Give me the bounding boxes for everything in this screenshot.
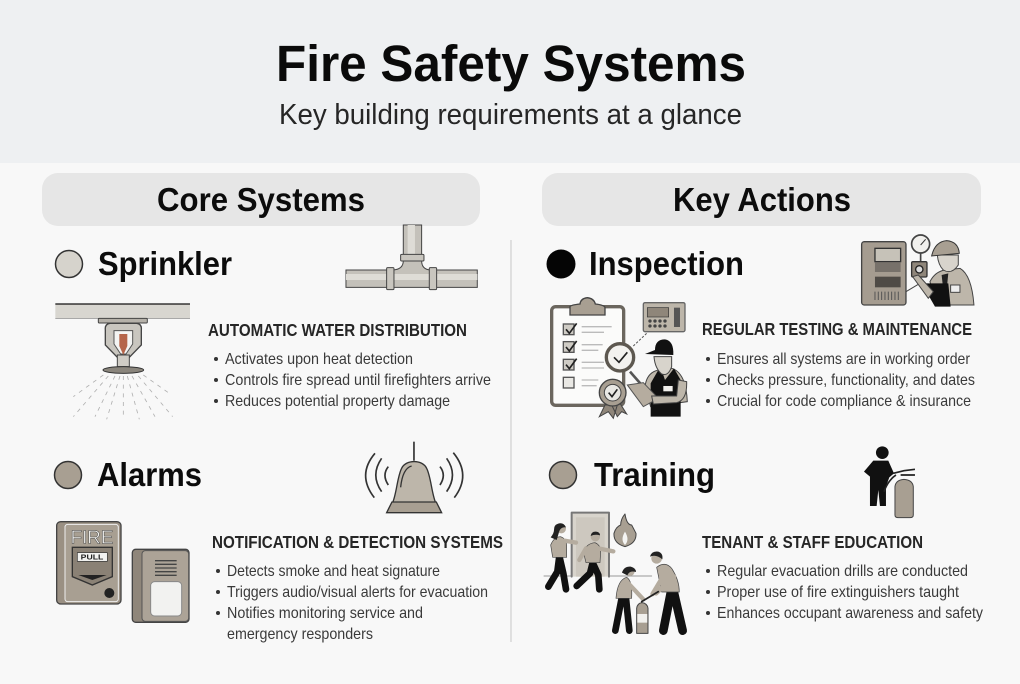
icon: checklist clipboard with worker <box>552 298 687 418</box>
section: inspection heading: Inspection <box>589 245 744 282</box>
icon: evacuation drill and extinguisher training <box>544 513 683 633</box>
panel: key actions heading: Key Actions <box>673 181 851 218</box>
panel: core systems heading <box>42 173 480 226</box>
woman walking <box>548 523 576 589</box>
icon: pipe tee <box>346 225 477 290</box>
text: inspection details <box>702 319 975 410</box>
section: sprinkler heading: Sprinkler <box>98 245 232 282</box>
subtitle: Key building requirements at a glance <box>279 99 742 131</box>
text: training details: Regular evacuation drills are conducted <box>717 563 968 580</box>
text: sprinkler details: AUTOMATIC WATER DISTRIBUTION <box>208 320 467 340</box>
text: alarms details: Notifies monitoring service and <box>227 605 423 622</box>
text: alarms details: Triggers audio/visual alerts for evacuation <box>227 584 488 601</box>
icon: horn strobe <box>132 549 189 622</box>
text: alarms details: NOTIFICATION & DETECTION SYSTEMS <box>212 532 503 552</box>
text: inspection details: Ensures all systems are in working order <box>717 351 971 368</box>
text: inspection details: Checks pressure, functionality, and dates <box>717 372 975 389</box>
text: alarms details: emergency responders <box>227 626 373 643</box>
text: sprinkler details: Reduces potential property damage <box>225 393 450 410</box>
text: sprinkler details <box>208 320 491 410</box>
panel: core systems heading: Core Systems <box>157 181 365 218</box>
header band <box>0 0 1020 163</box>
text: training details <box>702 532 983 622</box>
text: inspection details: REGULAR TESTING & MAINTENANCE <box>702 319 972 339</box>
text: training details: Enhances occupant awareness and safety <box>717 605 983 622</box>
text: training details: Proper use of fire extinguishers taught <box>717 584 959 601</box>
text: training details: TENANT & STAFF EDUCATION <box>702 532 923 552</box>
icon: alarm bell <box>366 442 463 513</box>
child with extinguisher <box>615 567 643 631</box>
boy running <box>577 532 613 589</box>
adult instructor <box>650 552 683 631</box>
icon: technician at control panel <box>862 235 974 307</box>
icon: sprinkler head <box>55 304 190 419</box>
section: alarms heading <box>54 456 202 493</box>
icon: fire pull station: FIRE <box>71 527 113 548</box>
text: sprinkler details: Controls fire spread until firefighters arrive <box>225 372 491 389</box>
title: Fire Safety Systems <box>276 35 746 92</box>
section: training heading: Training <box>594 456 715 493</box>
icon: person with extinguisher <box>864 446 915 518</box>
icon: fire pull station: PULL <box>81 553 104 562</box>
section: alarms heading: Alarms <box>97 456 202 493</box>
text: alarms details: Detects smoke and heat signature <box>227 563 440 580</box>
text: inspection details: Crucial for code compliance & insurance <box>717 393 971 410</box>
panel: key actions heading <box>542 173 981 226</box>
icon: fire pull station <box>57 522 121 604</box>
text: alarms details <box>212 532 503 643</box>
text: sprinkler details: Activates upon heat detection <box>225 351 413 368</box>
